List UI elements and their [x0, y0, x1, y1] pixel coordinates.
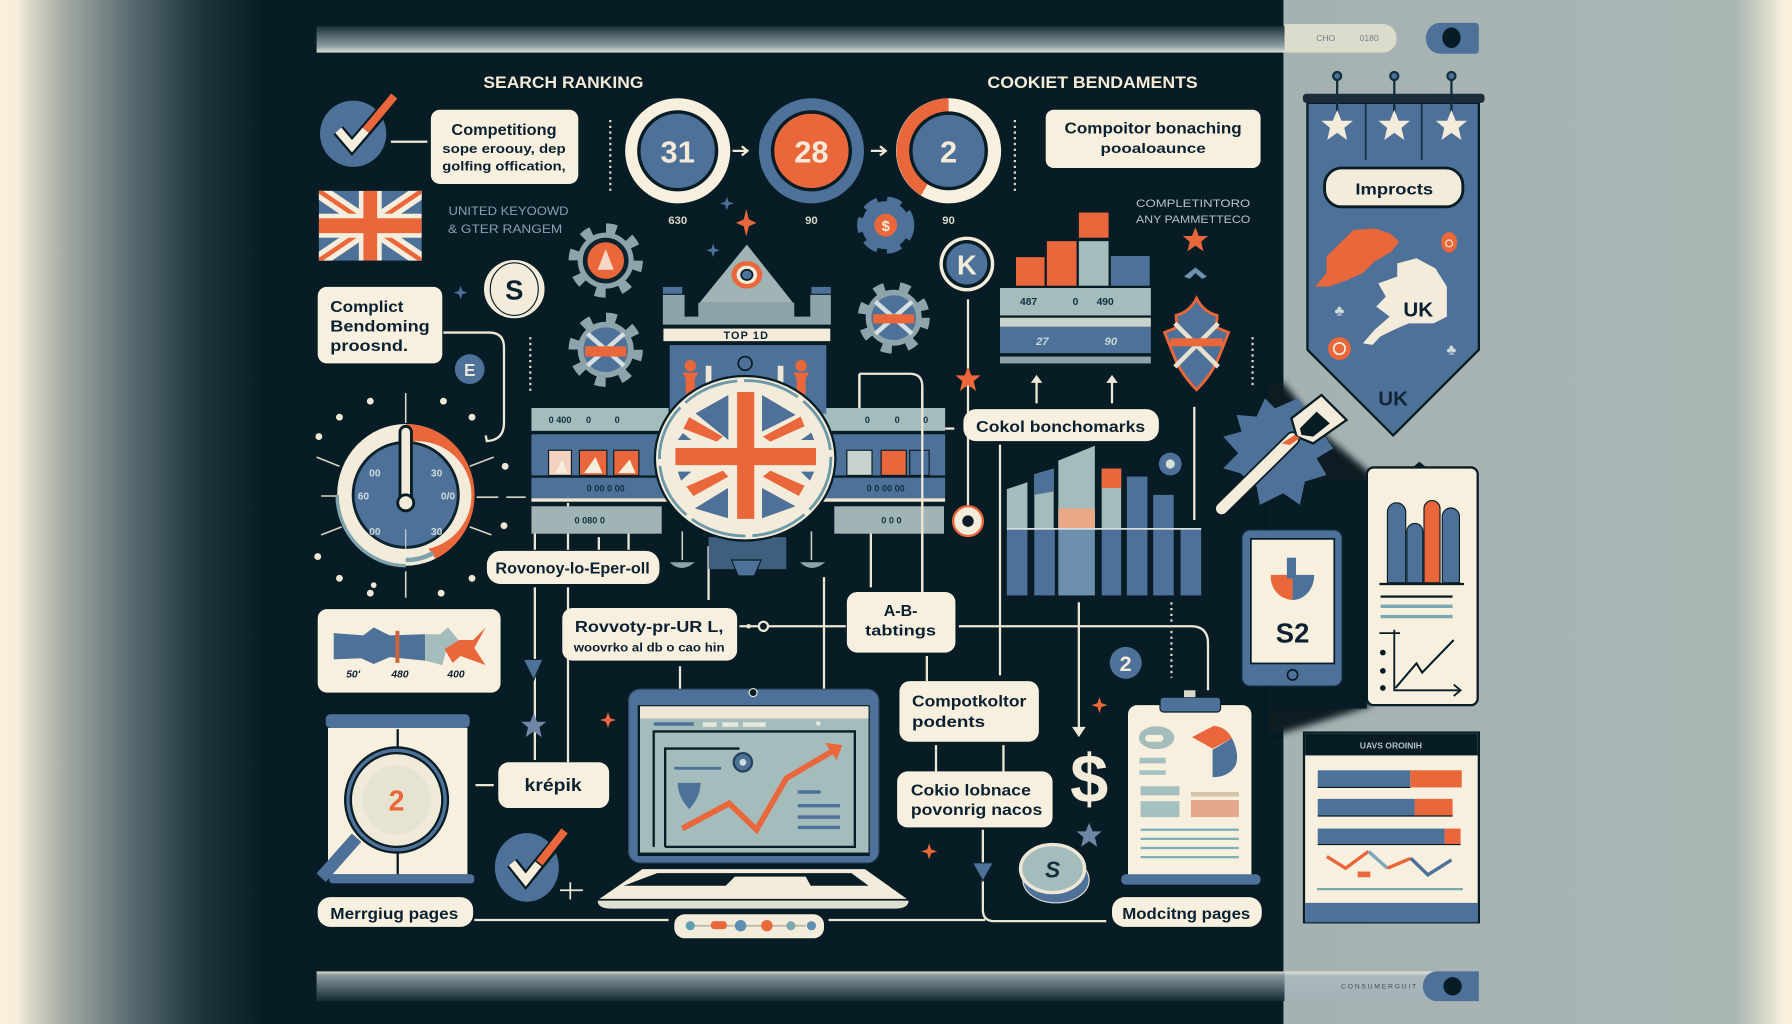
map markers: ♣ [1335, 303, 1345, 319]
label: krepik: krépik [525, 775, 582, 795]
label: krepik [498, 762, 609, 808]
clipboard report [1121, 690, 1261, 885]
gauge dial: 60 [358, 491, 369, 502]
scoreboard left: 0 080 0 [574, 515, 605, 525]
icon: E badge [455, 354, 485, 384]
icon: gear with dollar [862, 201, 910, 249]
stacked bar chart: 0 [1073, 297, 1079, 308]
label: A/B tests: A-B- [884, 603, 917, 620]
icon: blue star [1077, 823, 1102, 847]
card: range chart: 50' [346, 670, 361, 681]
scoreboard left: 0 00 0 00 [587, 483, 625, 493]
icon: S badge: S [505, 274, 523, 305]
icon: coin [1021, 845, 1089, 903]
card: bar and line charts [1367, 462, 1478, 705]
ranking circle 28: 90 [805, 215, 818, 227]
label: revenue per URL: Rovvoty-pr-UR L, [575, 619, 723, 636]
report card [1304, 733, 1479, 922]
callout: competitor benchmarking [1046, 110, 1261, 168]
bottom band [317, 971, 1479, 1001]
map: orange region [1315, 228, 1399, 287]
ranking circle 2: 2 [940, 134, 957, 169]
stacked bar chart: 27 [1035, 336, 1049, 348]
text: united kingdom label: & GTER RANGEM [448, 222, 562, 236]
label: revenue per URL [562, 608, 737, 661]
label: cookie loading: povonrig nacos [911, 802, 1042, 819]
text: UK map label: UK [1403, 299, 1433, 322]
icon: coin: S [1045, 857, 1060, 883]
stacked bar chart [1000, 213, 1151, 363]
callout: competitions: golfing offication, [442, 158, 566, 173]
scoreboard right [819, 374, 954, 592]
text: competitor label: COMPLETINTORO [1136, 198, 1250, 210]
pill: impacts: Improcts [1355, 181, 1433, 198]
arrow: 28 to 2 [871, 146, 886, 155]
label: competitor points: Compotkoltor [912, 693, 1026, 710]
gauge dial [314, 393, 526, 598]
stacked bar chart: 490 [1097, 297, 1114, 308]
map markers [1328, 232, 1457, 360]
icon: number 2 badge [1110, 647, 1142, 679]
scoreboard right: 0 0 00 00 [867, 483, 905, 493]
label: revenue per all: Rovonoy-lo-Eper-oll [495, 561, 650, 578]
castle: top 10: TOP 1D [723, 330, 769, 342]
connector node [746, 622, 768, 631]
icon: gear with dollar: $ [882, 219, 891, 235]
benchmark column chart [1007, 446, 1201, 595]
icon: rail star [955, 367, 981, 391]
figures on castle [682, 360, 809, 394]
label: A/B tests [847, 592, 955, 653]
label: competitor points: podents [912, 714, 985, 731]
icon: S badge [483, 259, 545, 319]
ranking circle 2: 90 [942, 215, 955, 227]
card: range chart [318, 609, 501, 693]
scoreboard left: 0 400 [549, 415, 571, 425]
gauge dial: 0/0 [441, 491, 455, 502]
icon: E badge: E [464, 360, 475, 380]
callout: competitions [431, 110, 578, 184]
icon: small bell badge [1159, 453, 1182, 475]
icon: check badge top [320, 96, 427, 167]
icon: dollar sign: $ [1070, 740, 1108, 817]
gauge dial: 30 [431, 527, 443, 538]
stacked bar chart: 90 [1105, 336, 1118, 348]
laptop [598, 689, 909, 909]
label: merging pages left: Merrgiug pages [330, 906, 458, 923]
label: cookie loading [897, 771, 1053, 827]
icon: rail ring [953, 506, 983, 536]
starburst with wrench [1222, 395, 1347, 509]
pill: impacts [1325, 168, 1463, 207]
stacked bar chart: 487 [1020, 297, 1037, 308]
callout: complete benchmarking process: proosnd. [330, 338, 408, 355]
icon: K badge: K [957, 249, 977, 280]
label: revenue per URL: woovrko al db o cao hin [573, 640, 725, 654]
central Union Jack badge [655, 376, 835, 541]
ranking circle 31: 31 [661, 134, 695, 169]
label: cookie benchmarks [963, 409, 1159, 441]
heading: cookie benchmarks: COOKIET BENDAMENTS [987, 73, 1198, 92]
ranking circle 28: 28 [794, 134, 829, 169]
icon: small sparks [454, 197, 734, 299]
icon: star with chevron [1183, 227, 1208, 279]
icon: UK shield [1165, 298, 1229, 390]
decorative sparks [736, 209, 1107, 859]
scoreboard left: 0 [586, 415, 591, 425]
arrow: 31 to 28 [733, 146, 747, 155]
text: competitor label [1136, 198, 1250, 226]
callout: competitor benchmarking: pooaloaunce [1101, 141, 1206, 157]
scoreboard right: 0 [895, 415, 900, 425]
gauge dial: 00 [369, 469, 381, 480]
bottom band: CONSUMERGUIT [1341, 984, 1418, 991]
callout: competitions: Competitiong [451, 122, 557, 139]
heading: search ranking: SEARCH RANKING [483, 73, 643, 92]
map markers: ♣ [1447, 342, 1457, 358]
top band: 0180 [1360, 33, 1379, 43]
label: cookie benchmarks: Cokol bonchomarks [976, 419, 1145, 436]
base under badge [670, 531, 825, 576]
top band: CHO [1316, 33, 1336, 43]
tablet: S2 [1276, 617, 1309, 648]
icon: number 2 badge: 2 [1120, 651, 1132, 676]
arrow: process to gauge [443, 333, 504, 441]
ranking circle 31 [625, 98, 730, 227]
callout: complete benchmarking process: Complict [330, 299, 404, 316]
UK pennant banner [1303, 72, 1485, 435]
dotted dividers [530, 120, 1253, 394]
card: range chart: 400 [446, 670, 465, 681]
callout: complete benchmarking process: Bendoming [330, 318, 430, 335]
text: competitor label: ANY PAMMETTECO [1136, 214, 1250, 226]
callout: complete benchmarking process [318, 287, 442, 363]
ranking circle 2 [896, 98, 1001, 227]
card: range chart: 480 [390, 670, 409, 681]
callout: competitor benchmarking: Compoitor bonaching [1065, 121, 1242, 138]
icon: gear with flag [574, 318, 638, 382]
scoreboard right: 0 0 0 [881, 515, 902, 525]
report card: UAVS OROINIH [1360, 741, 1422, 751]
ranking circle 31: 630 [668, 215, 687, 227]
label: cookie loading: Cokio lobnace [911, 782, 1031, 799]
board with magnifier [321, 714, 474, 883]
icon: check badge bottom [495, 830, 583, 902]
top band [317, 23, 1479, 54]
castle: top 10 [663, 245, 831, 414]
label: revenue per all [487, 551, 659, 584]
icon: gear with A [574, 229, 638, 293]
icon: gear with flag right [863, 287, 925, 349]
icon: UK flag [319, 191, 422, 261]
text: united kingdom label: UNITED KEYOOWD [449, 204, 569, 218]
progress pill [674, 914, 824, 938]
gauge dial: 30 [431, 469, 443, 480]
text: UK pennant tip: UK [1378, 388, 1408, 411]
icon: chevron marker [973, 863, 993, 881]
scoreboard left [531, 408, 669, 534]
label: competitor points [899, 681, 1039, 742]
callout: competitions: sope eroouy, dep [442, 141, 566, 156]
map: UK [1363, 258, 1447, 345]
label: merging pages left [318, 897, 473, 927]
icon: K badge [939, 237, 994, 291]
scoreboard right: 0 [865, 415, 870, 425]
gauge dial: 00 [369, 527, 381, 538]
scoreboard right: 0 [923, 415, 928, 425]
ranking circle 28 [759, 98, 864, 227]
label: modeling pages: Modcitng pages [1122, 906, 1250, 923]
text: united kingdom label [448, 204, 569, 236]
label: A/B tests: tabtings [865, 623, 936, 639]
connector lines [474, 299, 1208, 921]
label: modeling pages [1112, 897, 1262, 927]
arrows and stars on left rails [521, 659, 616, 737]
board with magnifier: 2 [389, 785, 405, 817]
report footer [1305, 903, 1478, 922]
tablet [1242, 530, 1342, 686]
scoreboard left: 0 [615, 415, 620, 425]
